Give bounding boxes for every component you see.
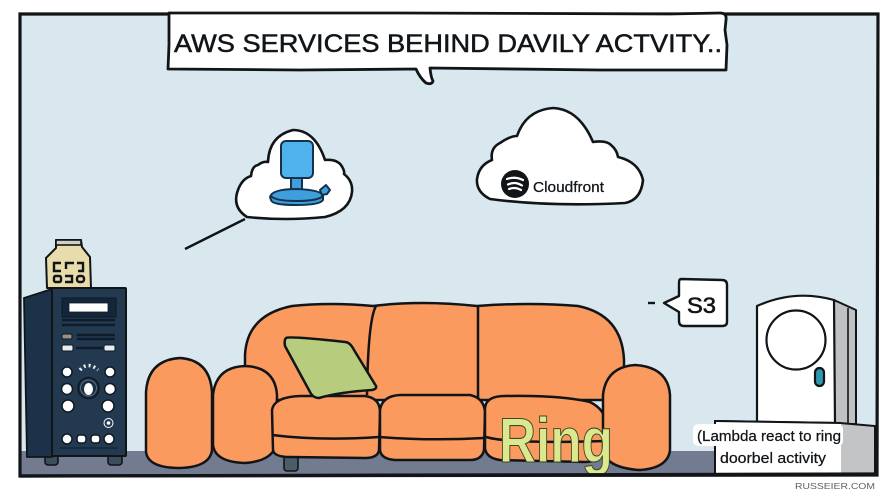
display (62, 298, 116, 317)
jar on speaker (46, 240, 91, 288)
sofa (146, 303, 670, 471)
doorbell device (757, 296, 856, 424)
title text: AWS SERVICES BEHIND DAVILY ACTVITY.. (174, 30, 722, 58)
label: Ring: Ring (499, 406, 613, 476)
caption box: Lambda: doorbel activity (720, 450, 827, 467)
left arm (213, 366, 277, 463)
frame bottom redraw (20, 474, 878, 476)
cloud: Cloudfront (477, 108, 643, 204)
indicator light (815, 368, 824, 386)
watermark: RUSSEIER.COM (795, 481, 875, 491)
feet (45, 455, 58, 465)
speech bubble: title (168, 13, 727, 84)
jar label marks (54, 263, 84, 282)
far left arm (146, 358, 212, 468)
device base (715, 421, 875, 474)
floor (20, 451, 877, 475)
camera lens (766, 310, 826, 370)
sofa back (245, 303, 624, 400)
label: S3: S3 (687, 293, 716, 318)
seat cushions (272, 396, 380, 458)
cloud: security camera (236, 130, 352, 219)
caption box: Lambda (693, 421, 843, 474)
pillow (285, 338, 376, 398)
label: Cloudfront: Cloudfront (533, 180, 604, 196)
dash before S3 (648, 302, 655, 304)
knobs (62, 367, 116, 444)
caption text: (Lambda react to ring (697, 428, 841, 445)
icon: camera on stand (270, 141, 330, 205)
speech bubble: S3 (664, 279, 727, 326)
icon: round logo (501, 170, 529, 198)
stereo tower (24, 288, 126, 465)
right arm (603, 365, 670, 470)
pointer line from camera cloud (185, 219, 245, 249)
sofa leg (284, 456, 298, 471)
